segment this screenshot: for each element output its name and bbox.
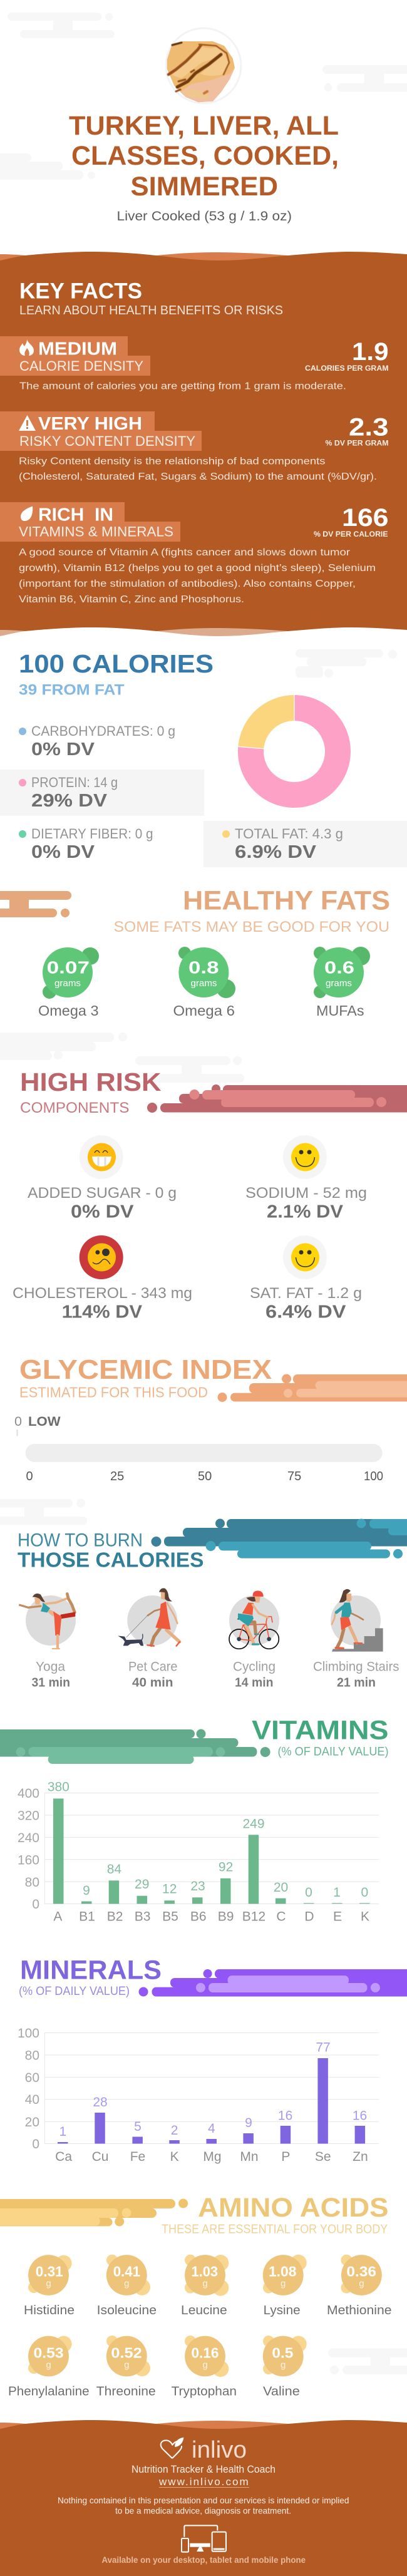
heading: minerals: MINERALS [20,1955,162,1986]
fact: calorie density: CALORIES PER GRAM [305,364,388,373]
fact: risky content density: 2.3 [349,413,388,441]
chart: minerals bar chart: K [170,2150,179,2164]
chart: minerals bar chart: Cu [92,2150,108,2164]
stat: tryptophan: Tryptophan [172,2385,237,2399]
stat: isoleucine: Isoleucine [97,2304,157,2317]
risk: added sugar: 0% DV [71,1202,134,1222]
activity: pet care: Pet Care [128,1659,178,1674]
chart: vitamins bar chart: 0 [361,1885,368,1900]
chart: glycemic index scale: 75 [287,1470,301,1483]
fact: calorie density: MEDIUM [38,339,117,359]
risk: cholesterol: CHOLESTEROL - 343 mg [13,1285,192,1302]
chart: vitamins bar chart: 12 [162,1882,177,1896]
title: SIMMERED [130,172,278,202]
icon: leaf [21,506,33,521]
chart: minerals bar chart: 16 [353,2108,367,2123]
risk: saturated fat [250,1235,362,1322]
chart: vitamins bar chart [18,1780,379,1924]
chart: vitamins bar chart: B9 [218,1910,234,1924]
activity: cycling [229,1590,279,1689]
fact: risky content density: % DV PER GRAM [326,439,388,448]
stat: methionine: g [359,2278,364,2289]
heading: how to burn those calories: THOSE CALORIES [18,1548,204,1571]
stat: MUFAs: 0.6 [324,958,354,977]
stat: threonine: 0.52 [111,2345,142,2361]
fact: calorie density: CALORIE DENSITY [19,358,143,374]
activity: climbing stairs [313,1589,399,1689]
activity: climbing stairs: 21 min [337,1676,376,1689]
chart: glycemic index scale: 100 [364,1470,383,1483]
stat: valine: g [281,2359,286,2370]
chart: vitamins bar chart: K [361,1910,369,1924]
fact: rich in vitamins and minerals: growth), Vitamin B12 (helps you to get a good night’s sleep), Selenium [19,563,376,574]
chart: vitamins bar chart: 84 [107,1862,121,1877]
stat: omega 6: grams [190,978,217,989]
stat: methionine: Methionine [327,2304,392,2317]
fact: rich in vitamins and minerals [0,502,388,605]
stat: lysine: 1.08 [269,2263,297,2279]
risk: cholesterol: 114% DV [62,1302,143,1322]
fact: calorie density: 1.9 [352,338,388,366]
stat: phenylalanine: g [46,2359,51,2370]
chart: vitamins bar chart: 249 [242,1817,265,1831]
chart: vitamins bar chart: 1 [333,1885,341,1900]
chart: minerals bar chart: 20 [25,2115,39,2130]
stat: lysine [263,2255,307,2317]
fact: calorie density: The amount of calories you are getting from 1 gram is moderate. [19,381,346,392]
chart: minerals bar chart: 77 [316,2040,331,2054]
chart: minerals bar chart: P [281,2150,290,2164]
risk: sodium: 2.1% DV [267,1202,344,1222]
stat: MUFAs: MUFAs [316,1002,364,1019]
heading: healthy fats: SOME FATS MAY BE GOOD FOR YOU [114,919,389,935]
fact: rich in vitamins and minerals: % DV PER CALORIE [314,530,388,538]
stat: leucine: 1.03 [192,2263,218,2279]
heading: vitamins: VITAMINS [252,1716,388,1746]
legend: total fat: 6.9% DV [235,842,317,862]
stat: tryptophan: 0.16 [192,2345,219,2361]
risk: sodium: SODIUM - 52 mg [245,1185,367,1202]
heading: how to burn those calories: HOW TO BURN [18,1530,143,1550]
stat: histidine [24,2255,75,2317]
logo: inlivo [161,2437,247,2463]
chart: minerals bar chart [18,2026,379,2164]
stat: phenylalanine: 0.53 [34,2345,64,2361]
fact: rich in vitamins and minerals: RICH IN [38,505,113,525]
stat: threonine: Threonine [96,2385,156,2399]
chart: minerals bar chart: 60 [25,2071,39,2085]
chart: vitamins bar chart: 0 [32,1897,39,1912]
chart: glycemic index scale: 50 [198,1470,212,1483]
fact: risky content density: (Cholesterol, Saturated Fat, Sugars & Sodium) to the amount (%DV/gr). [19,471,377,482]
heading: 100 calories: 39 FROM FAT [19,681,125,699]
chart: vitamins bar chart: 29 [135,1877,149,1892]
chart: vitamins bar chart: 320 [18,1809,39,1823]
heading: high risk components [20,1068,407,1116]
icon: woman in yoga pose [20,1594,75,1649]
chart: glycemic index scale: 0 [26,1470,33,1483]
risk: saturated fat: 6.4% DV [265,1302,346,1322]
chart: vitamins bar chart: 20 [274,1880,288,1895]
heading: healthy fats: HEALTHY FATS [183,885,390,915]
heading: key facts: KEY FACTS [19,279,142,304]
chart: vitamins bar chart: A [53,1910,62,1924]
heading: glycemic index: ESTIMATED FOR THIS FOOD [19,1384,208,1400]
icon: woman walking a dog [118,1588,180,1646]
chart: minerals bar chart: 0 [32,2137,39,2151]
risk: cholesterol [13,1235,192,1322]
website link: www.inlivo.com [158,2476,249,2488]
fact: risky content density: RISKY CONTENT DENSITY [19,433,195,449]
stat: leucine [181,2255,229,2317]
logo: inlivo: inlivo [192,2437,247,2463]
chart: minerals bar chart: 16 [278,2108,292,2123]
chart: vitamins bar chart: 80 [25,1875,39,1890]
stat: omega 6 [173,947,235,1019]
tagline: Nutrition Tracker & Health Coach [131,2463,276,2475]
disclaimer [58,2495,349,2516]
stat: valine: Valine [263,2385,300,2399]
chart: vitamins bar chart: 400 [18,1786,39,1801]
chart: vitamins bar chart: C [276,1910,286,1924]
legend: carbohydrates [19,723,175,760]
fact: rich in vitamins and minerals: 166 [342,504,388,532]
icon: grilled turkey liver food photo [166,28,241,103]
stat: histidine: Histidine [24,2304,75,2317]
heading: how to burn those calories [18,1519,407,1571]
stat: tryptophan: g [202,2359,208,2370]
chart: vitamins bar chart: E [333,1910,342,1924]
availability note: Available on your desktop, tablet and mobile phone [101,2555,306,2565]
activity: cycling: Cycling [233,1659,276,1674]
icon: flame [19,339,34,356]
stat: leucine: g [202,2278,208,2289]
chart: vitamins bar chart: 9 [83,1883,90,1898]
legend: total fat: TOTAL FAT: 4.3 g [235,826,343,842]
chart: minerals bar chart: 28 [93,2095,108,2110]
chart: minerals bar chart: 40 [25,2093,39,2107]
title [69,111,339,202]
stat: histidine: 0.31 [36,2263,63,2279]
disclaimer: to be a medical advice, diagnosis or treatment. [115,2506,291,2516]
panel: footer [0,2420,407,2576]
panel: key facts [0,252,407,640]
chart: minerals bar chart: Zn [353,2150,368,2164]
activity: yoga: 31 min [31,1676,70,1689]
icon: warning triangle [19,415,36,431]
fact: rich in vitamins and minerals: Vitamin B6, Vitamin C, Zinc and Phosphorus. [19,594,244,605]
chart: calorie donut [238,695,351,808]
legend: dietary fiber: DIETARY FIBER: 0 g [31,826,153,842]
legend: dietary fiber: 0% DV [31,842,95,862]
heading: amino acids [0,2193,388,2237]
heading: vitamins: (% OF DAILY VALUE) [278,1746,388,1759]
icon: grinning face [88,1143,116,1171]
panel: macronutrient legend [0,723,407,867]
legend: protein: 29% DV [31,791,108,811]
chart: minerals bar chart: Fe [130,2150,145,2164]
heading: high risk components: HIGH RISK [20,1068,162,1096]
chart: glycemic index scale: LOW [28,1414,61,1429]
stat: lysine: g [281,2278,286,2289]
stat: isoleucine: g [124,2278,129,2289]
activity: pet care: 40 min [132,1676,173,1689]
heading: high risk components: COMPONENTS [20,1100,129,1116]
stat: isoleucine [97,2255,157,2317]
legend: protein: PROTEIN: 14 g [31,775,118,790]
stat: omega 3: 0.07 [47,958,90,977]
chart: glycemic index scale [14,1414,383,1483]
stat: omega 6: Omega 6 [173,1002,235,1019]
stat: valine [263,2336,307,2399]
chart: vitamins bar chart: 92 [219,1860,233,1875]
fact: risky content density [0,411,388,482]
stat: omega 3: grams [54,978,81,989]
chart: minerals bar chart: Se [315,2150,331,2164]
heading: amino acids: AMINO ACIDS [198,2193,388,2223]
icon: worried face [88,1244,116,1271]
risk: saturated fat: SAT. FAT - 1.2 g [250,1285,362,1302]
heading: glycemic index: GLYCEMIC INDEX [19,1354,272,1385]
chart: vitamins bar chart: 240 [18,1831,39,1845]
heading: glycemic index [19,1354,407,1402]
chart: minerals bar chart: Mg [203,2150,222,2164]
fact: rich in vitamins and minerals: (important for the stimulation of antibodies). Also contains Copper, [19,579,356,589]
stat: omega 6: 0.8 [188,958,219,977]
stat: histidine: g [46,2278,51,2289]
risk: added sugar [28,1135,177,1222]
legend: carbohydrates: 0% DV [31,739,95,760]
activity: climbing stairs: Climbing Stairs [313,1659,399,1674]
stat: valine: 0.5 [272,2345,294,2361]
legend: carbohydrates: CARBOHYDRATES: 0 g [31,723,175,739]
chart: glycemic index scale: 25 [110,1470,124,1483]
legend: protein [19,775,118,811]
risk: added sugar: ADDED SUGAR - 0 g [28,1185,177,1202]
stat: methionine [327,2255,392,2317]
icon: smiling face [291,1143,319,1171]
stat: isoleucine: 0.41 [113,2263,140,2279]
chart: vitamins bar chart: B3 [135,1910,150,1924]
chart: vitamins bar chart: B6 [190,1910,207,1924]
chart: vitamins bar chart: B5 [162,1910,178,1924]
chart: minerals bar chart: Mn [240,2150,259,2164]
title: CLASSES, COOKED, [71,141,339,171]
stat: methionine: 0.36 [346,2263,376,2279]
heading: 100 calories [19,649,214,699]
chart: vitamins bar chart: B1 [79,1910,95,1924]
legend: dietary fiber [19,826,153,862]
risk: sodium [245,1135,367,1222]
fact: risky content density: Risky Content density is the relationship of bad components [19,456,326,467]
heading: key facts: LEARN ABOUT HEALTH BENEFITS OR RISKS [19,304,283,317]
chart: vitamins bar chart: 0 [305,1885,312,1900]
activity: cycling: 14 min [235,1676,273,1689]
chart: vitamins bar chart: 23 [190,1879,205,1893]
fact: rich in vitamins and minerals: VITAMINS & MINERALS [19,524,173,540]
stat: threonine [96,2336,156,2399]
stat: MUFAs: grams [326,978,352,989]
chart: vitamins bar chart: 160 [18,1853,39,1867]
stat: phenylalanine [8,2336,90,2399]
stat: omega 3: Omega 3 [38,1002,99,1019]
heading: minerals: (% OF DAILY VALUE) [19,1985,130,1998]
chart: minerals bar chart: 80 [25,2049,39,2063]
activity: yoga: Yoga [36,1659,65,1674]
heading: 100 calories: 100 CALORIES [19,649,214,678]
chart: vitamins bar chart: B2 [107,1910,123,1924]
chart: minerals bar chart: 1 [59,2125,66,2139]
icon: desktop, tablet and phone [182,2525,226,2552]
heading: minerals [19,1955,407,1998]
chart: minerals bar chart: 9 [245,2116,252,2130]
chart: minerals bar chart: Ca [55,2150,72,2164]
chart: glycemic index scale: 0 [14,1414,22,1429]
stat: MUFAs [314,947,370,1019]
subtitle: serving size: Liver Cooked (53 g / 1.9 oz) [116,209,292,224]
chart: vitamins bar chart: B12 [242,1910,265,1924]
stat: tryptophan [172,2336,237,2399]
fact: risky content density: VERY HIGH [38,414,142,434]
activity: yoga [20,1594,76,1689]
icon: woman riding a bicycle [229,1590,279,1649]
chart: vitamins bar chart: D [304,1910,314,1924]
fact: rich in vitamins and minerals: A good source of Vitamin A (fights cancer and slows down tumor [19,547,350,558]
stat: phenylalanine: Phenylalanine [8,2385,90,2399]
fact: calorie density [0,336,388,392]
heading: healthy fats [0,885,390,935]
legend: total fat [222,826,343,862]
chart: vitamins bar chart: 380 [48,1780,70,1795]
heading: vitamins [0,1716,388,1764]
disclaimer: Nothing contained in this presentation and our services is intended or implied [58,2495,349,2505]
stat: leucine: Leucine [181,2304,227,2317]
activity: pet care [118,1588,180,1689]
stat: omega 3 [38,947,99,1019]
chart: minerals bar chart: 2 [171,2123,178,2138]
stat: threonine: g [124,2359,129,2370]
chart: minerals bar chart: 5 [134,2120,142,2134]
title: TURKEY, LIVER, ALL [69,111,339,141]
chart: minerals bar chart: 100 [18,2026,39,2041]
chart: minerals bar chart: 4 [208,2121,215,2136]
stat: lysine: Lysine [264,2304,301,2317]
icon: smiling face [291,1244,319,1271]
heading: amino acids: THESE ARE ESSENTIAL FOR YOUR BODY [162,2223,388,2237]
icon: woman climbing stairs [332,1589,383,1652]
heading: key facts [19,279,283,317]
